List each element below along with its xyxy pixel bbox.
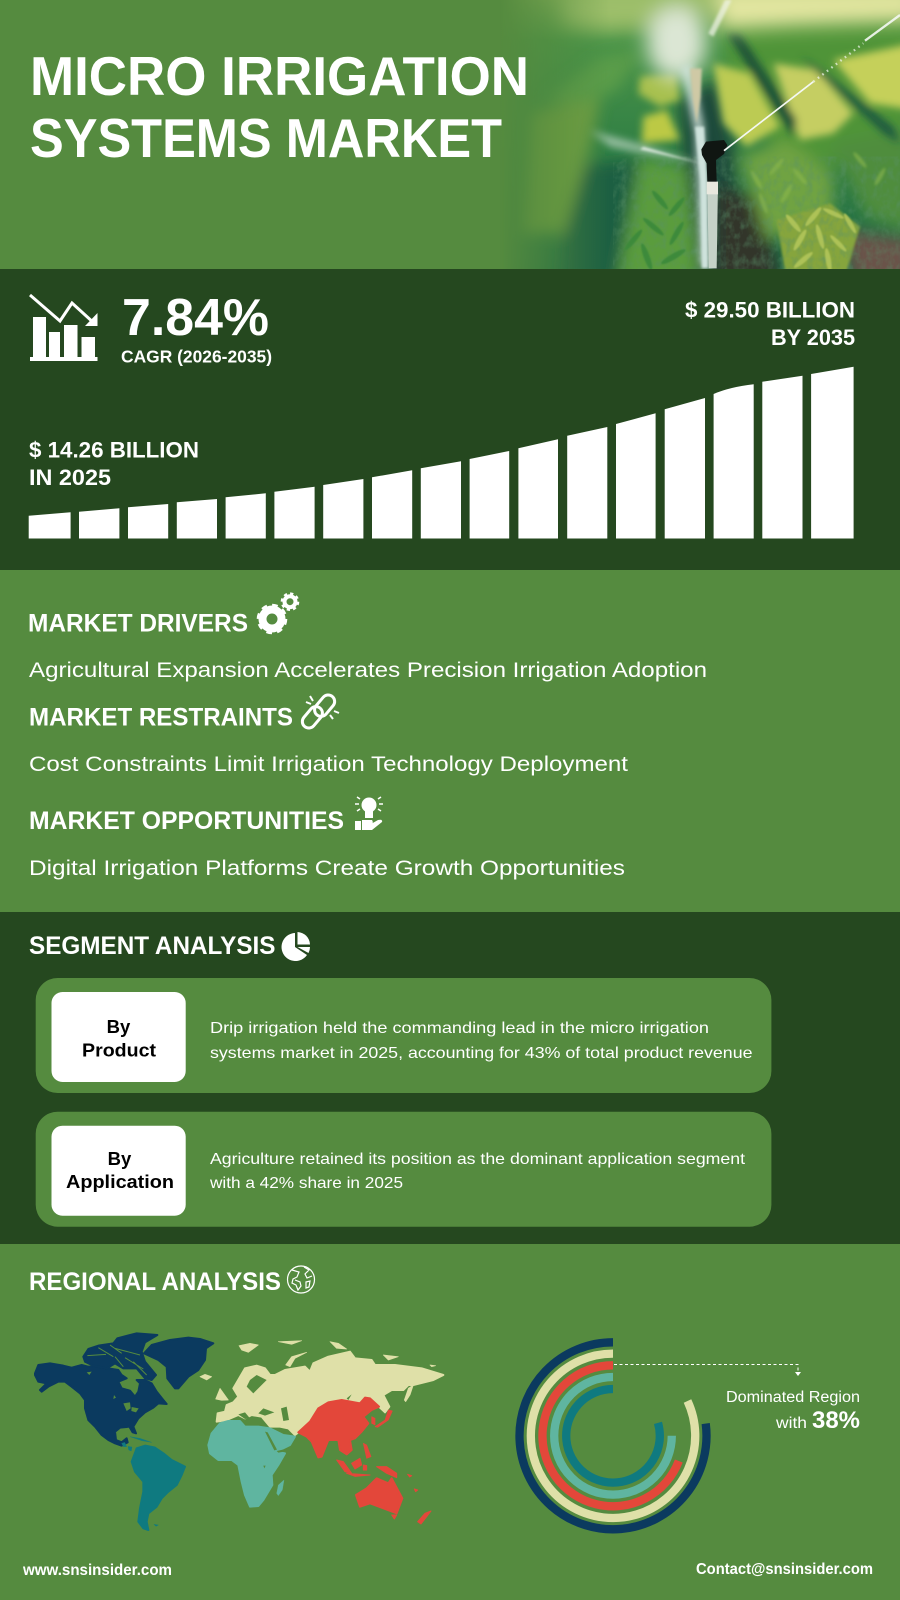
text: opportunity: Digital Irrigation Platforms Create Growth Opportunities xyxy=(29,856,625,880)
heading: market restraints: MARKET RESTRAINTS xyxy=(29,704,293,732)
world map xyxy=(35,1333,443,1530)
forecast value: $ 29.50 BILLION xyxy=(685,298,855,322)
forecast value xyxy=(685,298,855,350)
card: by product xyxy=(36,978,771,1093)
icon: chart with trend arrow xyxy=(30,295,98,361)
icon: gears xyxy=(259,594,298,632)
panel: market size xyxy=(0,269,900,570)
panel: market dynamics xyxy=(0,570,900,912)
base value: $ 14.26 BILLION xyxy=(29,438,199,462)
card: by product: Drip irrigation held the commanding lead in the micro irrigation xyxy=(210,1020,709,1037)
icon: broken chain xyxy=(300,692,339,731)
card: by product: systems market in 2025, accounting for 43% of total product revenue xyxy=(210,1045,753,1062)
card: by application: By xyxy=(108,1148,132,1169)
callout: dominated region: with xyxy=(775,1415,807,1432)
panel: regional analysis xyxy=(0,1244,900,1600)
text: driver: Agricultural Expansion Accelerates Precision Irrigation Adoption xyxy=(29,658,707,682)
callout: dominated region xyxy=(726,1389,860,1434)
panel: segment analysis xyxy=(0,912,900,1244)
forecast value: BY 2035 xyxy=(771,325,855,350)
heading: regional analysis: REGIONAL ANALYSIS xyxy=(29,1268,281,1296)
heading: market drivers: MARKET DRIVERS xyxy=(28,610,248,638)
map: Africa, Eurasia and Oceania xyxy=(200,1341,443,1524)
title: SYSTEMS MARKET xyxy=(30,107,502,169)
arrow: dashed leader line xyxy=(614,1364,801,1376)
icon: globe xyxy=(288,1266,314,1293)
heading: market opportunities: MARKET OPPORTUNITIES xyxy=(29,807,344,835)
card: by product: Product xyxy=(82,1040,156,1061)
card: by application: with a 42% share in 2025 xyxy=(209,1175,403,1192)
mist plume and water jets xyxy=(708,0,732,37)
callout: dominated region: 38% xyxy=(812,1407,860,1434)
footer: contact: Contact@snsinsider.com xyxy=(696,1561,873,1578)
base value: IN 2025 xyxy=(29,465,111,490)
text: restraint: Cost Constraints Limit Irrigation Technology Deployment xyxy=(29,752,628,776)
card: by application: Application xyxy=(66,1171,174,1192)
icon: light bulb in hand xyxy=(355,797,383,830)
card: by application xyxy=(36,1112,771,1227)
header panel xyxy=(30,0,900,283)
title xyxy=(30,45,529,169)
icon: pie chart xyxy=(282,932,310,961)
photo: sprinkler irrigating crop rows xyxy=(500,0,900,283)
map: North and South America xyxy=(35,1333,213,1530)
bar chart xyxy=(29,367,854,538)
radial chart xyxy=(519,1342,706,1529)
leaves xyxy=(784,206,858,272)
card: by application: Agriculture retained its position as the dominant application segment xyxy=(210,1151,746,1168)
heading: segment analysis: SEGMENT ANALYSIS xyxy=(29,932,276,960)
footer: website: www.snsinsider.com xyxy=(22,1562,172,1579)
CAGR value: 7.84% xyxy=(122,289,269,347)
card: by product: By xyxy=(107,1016,131,1037)
callout: dominated region: Dominated Region xyxy=(726,1389,860,1406)
CAGR value: CAGR (2026-2035) xyxy=(121,346,272,366)
base value xyxy=(29,438,199,490)
title: MICRO IRRIGATION xyxy=(30,45,529,107)
